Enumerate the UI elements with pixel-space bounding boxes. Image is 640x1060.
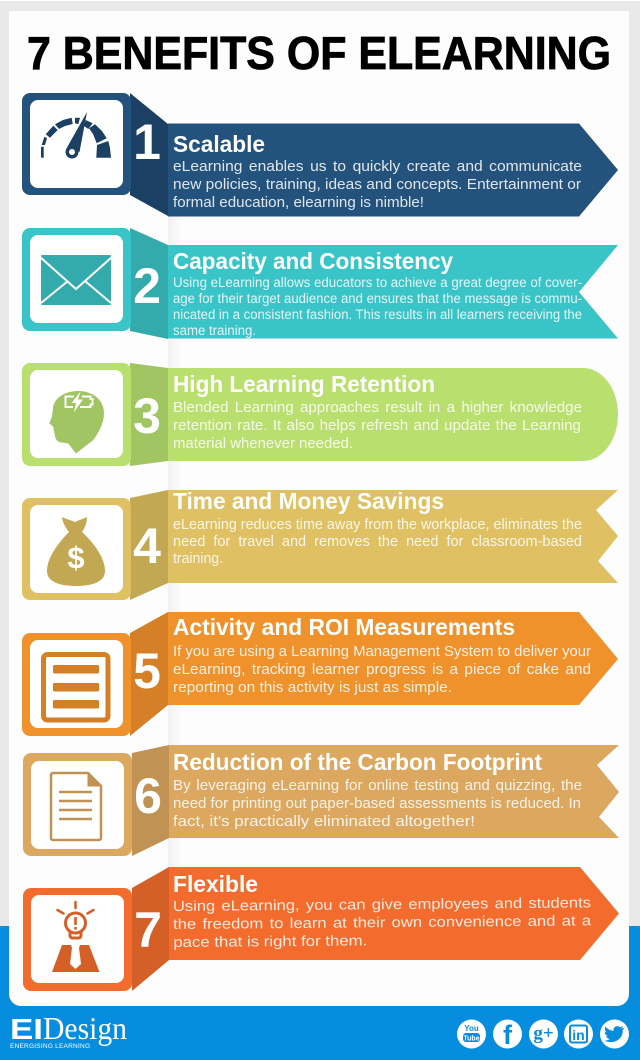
body text: Using eLearning, you can give employees and students [173, 895, 591, 915]
heading: Reduction of the Carbon Footprint [173, 749, 542, 775]
icon tile [22, 228, 131, 331]
panel: 5 Activity and ROI Measurements [22, 612, 618, 736]
body text: By leveraging eLearning for online testing and quizzing, the [173, 778, 582, 794]
body text: nicated in a consistent fashion. This results in all learners receiving the [173, 307, 582, 322]
heading: Activity and ROI Measurements [173, 614, 515, 640]
icon tile [23, 888, 132, 991]
body text [173, 275, 582, 338]
number: 6 [134, 768, 162, 824]
body text: fact, it's practically eliminated altogether! [173, 814, 475, 830]
body text: the freedom to learn at their own convenience and at a [173, 913, 592, 933]
body text [173, 778, 582, 830]
body text: Blended Learning approaches result in a higher knowledge [173, 400, 582, 416]
ribbon [168, 368, 618, 461]
icon: document [51, 773, 101, 840]
panel: 4 Time and Money Savings [22, 488, 618, 600]
icon: LinkedIn: in [572, 1027, 585, 1043]
body text [173, 517, 582, 567]
panel: 7 Flexible [23, 867, 619, 991]
panel: 3 High Learning Retention [22, 363, 618, 466]
connector fold [130, 612, 168, 736]
connector fold [132, 745, 169, 856]
body text: need for travel and removes the need for classroom-based [173, 534, 582, 550]
connector fold [130, 93, 168, 216]
icon tile [22, 498, 131, 600]
icon: YouTube: You [464, 1024, 479, 1033]
heading: High Learning Retention [173, 371, 435, 397]
ribbon [169, 867, 619, 960]
body text: If you are using a Learning Management System to deliver your [173, 644, 591, 660]
icon: Facebook: f [503, 1020, 513, 1050]
icon tile [22, 363, 131, 466]
logo: EIDesign: EI [10, 1014, 43, 1046]
icon tile [23, 753, 132, 856]
icon: money bag: $ [67, 540, 85, 575]
heading: Scalable [173, 131, 265, 157]
body text: eLearning reduces time away from the workplace, eliminates the [173, 517, 582, 533]
icon: Google Plus: g+ [533, 1023, 554, 1044]
icon: YouTube: Tube [463, 1036, 480, 1042]
number: 4 [133, 518, 161, 574]
number: 5 [133, 643, 161, 699]
ribbon [168, 124, 618, 216]
body text: formal education, elearning is nimble! [173, 195, 424, 211]
icon: Twitter [600, 1020, 629, 1048]
panel: 6 Reduction of the Carbon Footprint [23, 745, 619, 856]
icon tile [22, 633, 131, 736]
body text: need for printing out paper-based assessments is reduced. In [173, 796, 581, 812]
panel: 2 Capacity and Consistency [22, 228, 618, 339]
ribbon [169, 745, 619, 838]
body text: eLearning, tracking learner progress is a piece of cake and [173, 662, 591, 678]
heading: Time and Money Savings [173, 488, 444, 514]
number: 1 [133, 114, 161, 170]
icon tile [22, 93, 131, 195]
social icons [457, 1020, 629, 1050]
body text [173, 159, 582, 211]
body text: retention rate. It also helps refresh and update the Learning [173, 418, 581, 434]
icon: speedometer [41, 112, 111, 158]
body text: eLearning enables us to quickly create and communicate [173, 159, 582, 175]
icon: Facebook [493, 1020, 522, 1050]
body text [173, 895, 592, 951]
logo: EIDesign: Design [43, 1010, 127, 1046]
body text [173, 644, 591, 696]
icon: Google Plus [529, 1020, 558, 1048]
icon: list form [44, 654, 108, 720]
body text: Using eLearning allows educators to achieve a great degree of cover- [173, 275, 582, 290]
body text: material whenever needed. [173, 436, 353, 452]
heading: Capacity and Consistency [173, 248, 453, 274]
body text: reporting on this activity is just as simple. [173, 680, 452, 696]
ribbon [168, 245, 618, 338]
body text: same training. [173, 323, 256, 338]
panel: 1 Scalable [22, 93, 618, 216]
connector fold [130, 490, 168, 600]
connector fold [130, 228, 168, 339]
connector fold [132, 867, 169, 991]
body text: age for their target audience and ensures that the message is commu- [173, 291, 582, 306]
icon: person with light bulb head [52, 902, 100, 972]
icon: YouTube [457, 1020, 486, 1048]
logo: EIDesign [10, 1010, 127, 1050]
body text: new policies, training, ideas and concepts. Entertainment or [173, 177, 581, 193]
icon: LinkedIn [564, 1020, 593, 1048]
icon: head with battery [49, 391, 104, 454]
connector fold [130, 363, 168, 466]
icon: envelope [40, 255, 112, 305]
number: 7 [134, 902, 162, 958]
number: 3 [133, 388, 161, 444]
ribbon [168, 612, 618, 705]
logo: EIDesign: ENERGISING LEARNING [10, 1043, 90, 1050]
body text: training. [173, 551, 223, 567]
body text [173, 400, 582, 452]
heading: Flexible [173, 871, 258, 897]
number: 2 [133, 258, 161, 314]
ribbon [168, 490, 618, 583]
body text: pace that is right for them. [173, 933, 367, 951]
icon: money bag [47, 517, 105, 586]
